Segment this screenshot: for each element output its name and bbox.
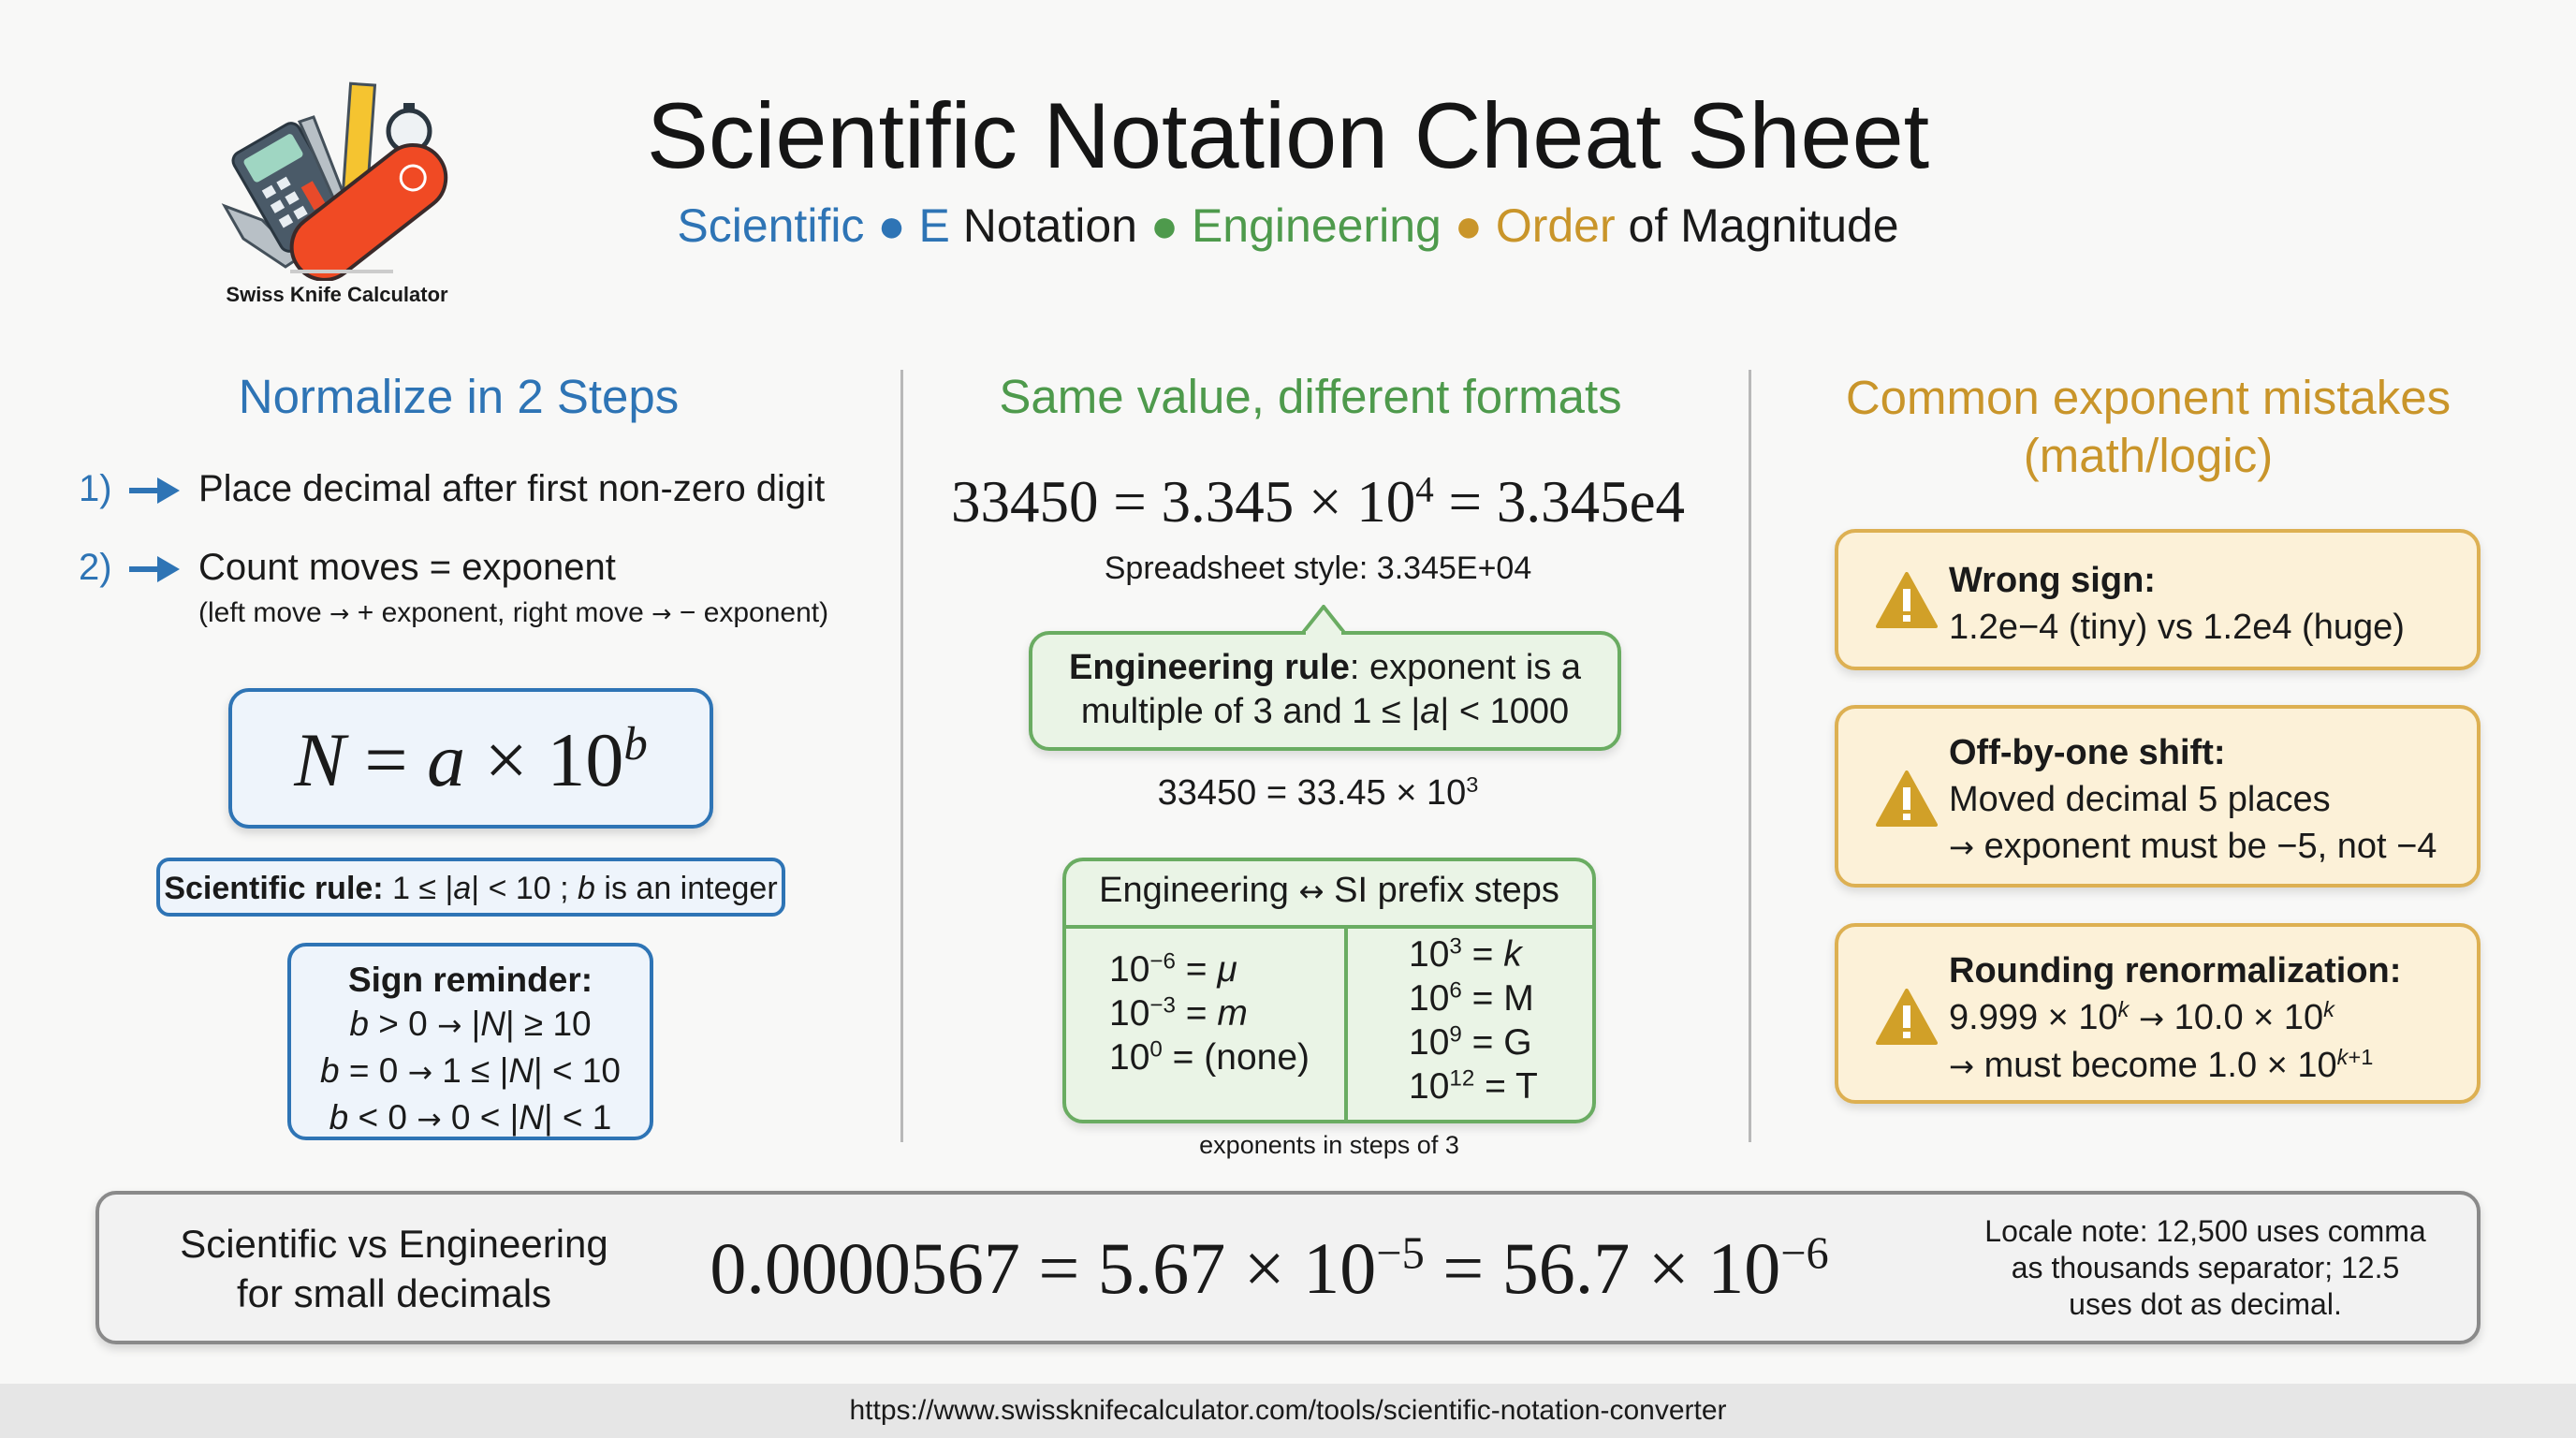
main equation: 33450 = 3.345 × 104 = 3.345e4 [951, 469, 1685, 535]
SI table: 109 = G [1409, 1022, 1532, 1063]
logo: swiss knife calculator: Swiss Knife Calculator [226, 283, 448, 306]
label: Scientific vs Engineering [180, 1222, 608, 1266]
step 2: Count moves = exponent [198, 547, 616, 588]
sign reminder [287, 943, 653, 1140]
spreadsheet: Spreadsheet style: 3.345E+04 [1105, 550, 1531, 586]
formula box: N = a × 10b [294, 717, 648, 802]
locale note: Locale note: 12,500 uses comma [1984, 1214, 2426, 1248]
panel: formats [951, 370, 1685, 1159]
bottom comparison bar [95, 1191, 2481, 1344]
engineering rule bubble [1029, 631, 1621, 751]
scientific rule: Scientific rule: 1 ≤ |a| < 10 ; b is an integer [164, 871, 778, 906]
warning 3: Rounding renormalization: [1949, 951, 2401, 990]
sign reminder: b < 0 → 0 < |N| < 1 [329, 1098, 611, 1137]
warning 2 [1835, 705, 2481, 888]
heading [1846, 371, 2451, 482]
SI table: 103 = k [1409, 934, 1522, 975]
formula box [228, 688, 713, 829]
step 2: 2) [79, 547, 112, 588]
steps note: exponents in steps of 3 [1199, 1131, 1459, 1159]
locale note: uses dot as decimal. [2069, 1287, 2342, 1321]
subtitle: Scientific ● E Notation ● Engineering ● Order of Magnitude [677, 199, 1899, 252]
locale note [1984, 1214, 2426, 1321]
step 2 note: (left move → + exponent, right move → − exponent) [198, 597, 828, 628]
warning 3: → must become 1.0 × 10k+1 [1949, 1045, 2373, 1085]
scientific rule [156, 858, 785, 917]
title: Scientific Notation Cheat Sheet [647, 83, 1929, 187]
step 1: Place decimal after first non-zero digit [198, 468, 825, 509]
engineering example: 33450 = 33.45 × 103 [1158, 772, 1478, 813]
SI table: 10−3 = m [1109, 993, 1248, 1034]
SI table: 1012 = T [1409, 1066, 1538, 1107]
equation: 0.0000567 = 5.67 × 10−5 = 56.7 × 10−6 [710, 1227, 1829, 1309]
SI table: 10−6 = μ [1109, 949, 1237, 990]
panel: mistakes [1846, 371, 2451, 482]
warning 1 [1835, 529, 2481, 670]
warning 1: 1.2e−4 (tiny) vs 1.2e4 (huge) [1949, 608, 2405, 647]
label: for small decimals [237, 1271, 551, 1315]
footer url: https://www.swissknifecalculator.com/tools/scientific-notation-converter [849, 1395, 1727, 1426]
label [180, 1222, 608, 1315]
SI table: 106 = M [1409, 978, 1534, 1019]
footer [0, 1384, 2576, 1438]
panel: normalize [79, 370, 828, 1140]
step 1: 1) [79, 468, 112, 509]
SI table [1062, 858, 1596, 1123]
heading: Normalize in 2 Steps [239, 370, 679, 423]
warning 2: Off-by-one shift: [1949, 733, 2226, 772]
sign reminder: b > 0 → |N| ≥ 10 [349, 1005, 592, 1043]
SI table: Engineering ↔ SI prefix steps [1099, 871, 1559, 910]
locale note: as thousands separator; 12.5 [2012, 1251, 2399, 1284]
warning 3: 9.999 × 10k → 10.0 × 10k [1949, 997, 2334, 1037]
heading: Common exponent mistakes [1846, 371, 2451, 424]
warning 3 [1835, 923, 2481, 1104]
SI table: 100 = (none) [1109, 1037, 1310, 1078]
sign reminder: Sign reminder: [348, 961, 593, 999]
engineering rule bubble: multiple of 3 and 1 ≤ |a| < 1000 [1081, 692, 1569, 731]
sign reminder: b = 0 → 1 ≤ |N| < 10 [320, 1051, 621, 1090]
dividers [900, 370, 903, 1142]
warning 2: → exponent must be −5, not −4 [1949, 827, 2437, 866]
logo: swiss knife calculator [221, 82, 448, 306]
warning 2: Moved decimal 5 places [1949, 780, 2331, 819]
engineering rule bubble: Engineering rule: exponent is a [1069, 648, 1581, 687]
warning 1: Wrong sign: [1949, 561, 2156, 600]
heading: (math/logic) [2024, 429, 2273, 482]
heading: Same value, different formats [999, 370, 1622, 423]
